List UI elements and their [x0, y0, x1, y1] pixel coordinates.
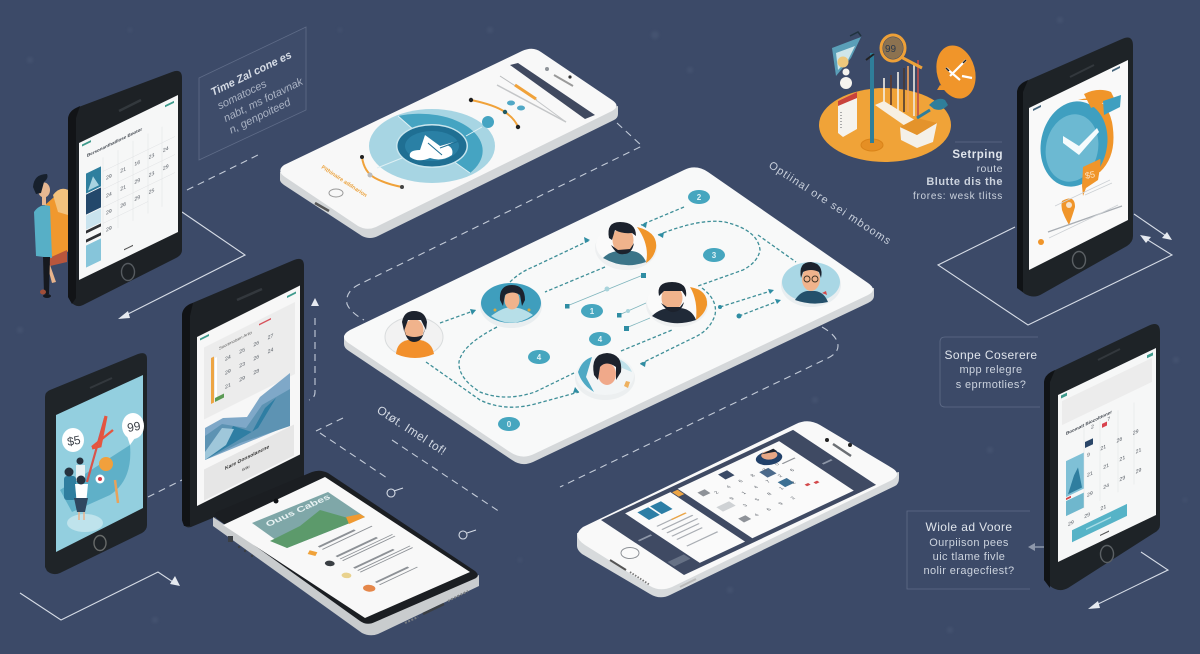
- avatar: orange crescent centre: [646, 282, 708, 327]
- speech bubble: 99: [126, 419, 142, 435]
- article banner: Ouus Cabes: [264, 493, 333, 529]
- price tag: $5: [1084, 169, 1096, 181]
- earpiece: [90, 378, 112, 388]
- speech bubble: $5: [66, 433, 82, 449]
- screen: calendar and area chart: Soortmolsen Anlo: [219, 330, 252, 351]
- avatar: white suit: [575, 353, 635, 400]
- central tablet: [344, 167, 874, 464]
- callout: time zone: n, genpoiteed: [227, 96, 293, 136]
- speech bubble with marks: [931, 41, 981, 103]
- screen: article: [223, 477, 470, 618]
- home button: [1072, 252, 1086, 268]
- callout: wiole ad voore: [907, 511, 1030, 589]
- number badges: 3: [712, 251, 717, 260]
- clock dial: [1033, 90, 1121, 193]
- screen: calendar and area chart: [197, 286, 300, 506]
- avatar: teal circle: [480, 283, 542, 328]
- article banner: [252, 492, 365, 548]
- screen: calendar and button: 29 24 29 29: [1087, 467, 1141, 499]
- white box: [900, 110, 937, 148]
- screen: calendar and area chart: 24 25 26 27: [225, 333, 273, 363]
- speaker and port: [610, 560, 696, 587]
- screen: calendar and area chart: 21 29 28: [225, 368, 259, 391]
- phone: clock: [1017, 38, 1133, 296]
- landscape screen: 3 5 8 1 2: [742, 481, 798, 508]
- side ports: [228, 536, 468, 623]
- screen: calendar and button: [1058, 348, 1156, 562]
- home button: [329, 189, 343, 197]
- map pin: [1062, 199, 1075, 225]
- earpiece: [1098, 349, 1120, 360]
- speech bubble: [62, 428, 84, 452]
- callout: wiole ad voore: uic tlame fivle: [933, 551, 1005, 563]
- home button: [94, 536, 106, 550]
- footer lines: [1038, 180, 1122, 245]
- callout: setrping: route: [977, 163, 1003, 175]
- number badges: [498, 190, 725, 431]
- callout: setrping: [913, 142, 1003, 202]
- screen: illustration: [56, 375, 144, 552]
- callout: wiole ad voore: nolir eragecfiest?: [924, 565, 1014, 577]
- earpiece and camera: [825, 438, 852, 456]
- home button: [122, 264, 134, 280]
- connector node icons: [387, 488, 476, 539]
- callout: sonpe coserere: Sonpe Coserere: [944, 348, 1038, 362]
- callout: sonpe coserere: mpp relegre: [959, 364, 1023, 376]
- phone: lying with donut: [280, 49, 618, 238]
- landscape screen: 2 4 6 8 3 5: [713, 462, 781, 495]
- phone: landscape calendar: [577, 421, 899, 597]
- bar columns: [884, 60, 918, 118]
- earpiece: [119, 100, 141, 111]
- speech bubble: [122, 413, 144, 445]
- landscape screen: [601, 430, 876, 575]
- callout: wiole ad voore: Ourpiison pees: [929, 537, 1009, 549]
- flag with coin: [832, 32, 861, 76]
- avatar thumbnail: [751, 448, 787, 468]
- callout: time zone: nabt, ms fotavnak: [222, 76, 306, 125]
- number badges: 1: [590, 307, 595, 316]
- orange arcs: [360, 98, 520, 189]
- callout: setrping: Blutte dis the: [926, 176, 1003, 188]
- price tag: [1082, 159, 1100, 196]
- screen: calendar: Bersonanthatllose Bootor: [87, 127, 142, 159]
- landscape screen: 4 6 9 2: [753, 496, 797, 518]
- callout: setrping: frores: wesk tlitss: [913, 191, 1003, 202]
- screen: calendar: 29: [106, 225, 112, 234]
- screen: calendar and button: 9 21 26 29: [1087, 429, 1139, 459]
- screen: calendar and button: 29 29 21: [1068, 504, 1106, 528]
- callout: sonpe coserere: s eprmotlies?: [956, 379, 1026, 391]
- angled label: optional: Optiinal ore sei mbooms: [766, 159, 894, 248]
- number badges: 4: [598, 335, 603, 344]
- earpiece and camera: [545, 67, 573, 86]
- phone: calendar right: [1044, 324, 1160, 590]
- number badges: 2: [697, 193, 702, 202]
- screen: calendar: 29 26 29 25: [106, 188, 154, 217]
- magnifier bubble: 99: [885, 44, 897, 55]
- earpiece: [1070, 65, 1094, 77]
- callout: time zone: somatoces: [216, 78, 269, 112]
- avatar: orange crescent top: [595, 222, 657, 270]
- screen: calendar: [79, 95, 178, 280]
- number badges: 0: [507, 420, 512, 429]
- path nodes: [470, 222, 781, 393]
- landscape screen: 9 1 4 7 2 6: [728, 468, 797, 501]
- solid isometric arrows: [20, 212, 1172, 620]
- platform: [875, 101, 918, 128]
- status bar: [510, 63, 595, 119]
- white tower: [838, 68, 857, 137]
- earpiece: [237, 289, 262, 300]
- screen: calendar and button: 21 21 21 21: [1087, 447, 1141, 479]
- people beside phone: [33, 174, 70, 298]
- home button: [621, 548, 639, 558]
- speaker: [315, 203, 329, 211]
- phone: chart: [182, 259, 304, 527]
- avatar: glasses: [781, 262, 841, 307]
- angled label: total: Otøt. Imel tof!: [374, 403, 449, 458]
- number badges: 4: [537, 353, 542, 362]
- screen: calendar: 29 21 16 23 24: [106, 146, 169, 182]
- people: [64, 458, 88, 520]
- screen: calendar and button: 2 7: [1091, 416, 1110, 431]
- teal blob: [929, 99, 948, 110]
- phone: lying with article: [213, 471, 479, 635]
- heading lines: [497, 76, 566, 122]
- phone: illustration: [45, 353, 147, 574]
- isometric bar illustration: [819, 32, 981, 162]
- calendar tiles: [688, 457, 808, 524]
- callout: setrping: Setrping: [952, 149, 1003, 161]
- screen: calendar and area chart: 29 23 26 24: [225, 347, 273, 377]
- screen: clock: [1029, 60, 1128, 270]
- screen: calendar and area chart: Kare Gonsolancne: [225, 444, 269, 472]
- screen: calendar and button: Boomatt Biocolttoner: [1066, 409, 1112, 437]
- area chart: [205, 373, 290, 460]
- donut chart: [369, 109, 495, 183]
- avatar: orange shirt: [385, 311, 443, 358]
- dashed connector lines: [148, 123, 838, 512]
- phone: calendar left: [68, 71, 182, 306]
- screen: calendar and area chart: Wiki: [242, 464, 250, 472]
- home button: [1100, 546, 1114, 562]
- callout: wiole ad voore: Wiole ad Voore: [926, 520, 1012, 534]
- orange caption: Pithinaire addnarion: [320, 165, 368, 199]
- callout: time zone: [199, 27, 312, 160]
- callout: sonpe coserere: [940, 337, 1040, 407]
- screen: calendar: 24 21 29 23 29: [106, 164, 169, 200]
- magnifier bubble: [881, 35, 922, 68]
- workflow dashed paths: [426, 207, 796, 407]
- pole: [861, 53, 883, 151]
- callout: time zone: Time Zal cone es: [209, 49, 294, 99]
